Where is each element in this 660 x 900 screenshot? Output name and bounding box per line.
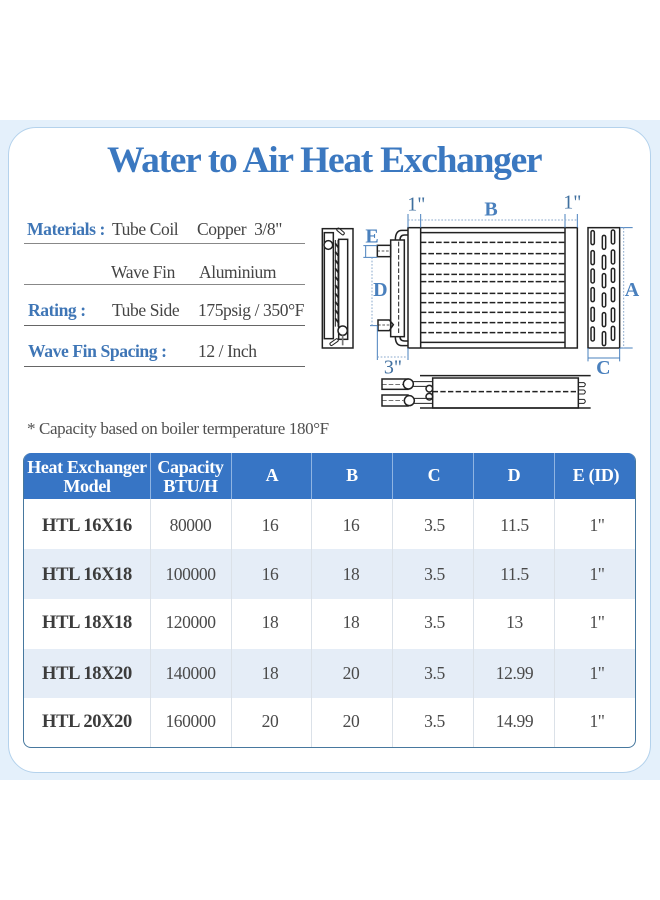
row: HTL 16X16: [42, 515, 605, 536]
row: HTL 18X20: 1": [589, 663, 605, 683]
spec: tube coil: Tube Coil: [112, 219, 178, 239]
row bands: [24, 549, 637, 599]
row: HTL 18X18: HTL 18X18: [42, 613, 132, 633]
row: HTL 20X20: 20: [262, 711, 278, 731]
row: HTL 16X18: 1": [589, 564, 605, 584]
title: Water to Air Heat Exchanger: [107, 140, 541, 181]
row: HTL 18X18: 13: [506, 612, 523, 632]
row: HTL 18X20: [42, 663, 605, 684]
row: HTL 18X18: 120000: [165, 612, 216, 632]
row: HTL 20X20: 20: [343, 711, 359, 731]
header: B: B: [346, 465, 358, 485]
header: capacity: Capacity: [157, 457, 224, 477]
row: HTL 18X18: 1": [589, 612, 605, 632]
spec: wave fin: Wave Fin: [111, 262, 175, 282]
row: HTL 18X20: 3.5: [424, 663, 445, 683]
header: model: Model: [63, 476, 111, 496]
dimension letters: E: [365, 226, 379, 248]
row: HTL 20X20: HTL 20X20: [42, 712, 132, 732]
header: D: D: [508, 465, 520, 485]
row: HTL 18X20: 12.99: [496, 663, 533, 683]
row: HTL 18X18: 18: [343, 612, 359, 632]
specification table: [23, 453, 636, 748]
footnote: * Capacity based on boiler termperature 180°F: [27, 419, 329, 438]
row: HTL 20X20: 1": [589, 711, 605, 731]
table header: [24, 453, 637, 499]
dimension letters: B: [484, 198, 498, 220]
dimension letters: 1": [563, 191, 581, 213]
header: C: C: [428, 465, 440, 485]
spec: aluminium: Aluminium: [199, 262, 276, 282]
row: HTL 18X18: 18: [262, 612, 278, 632]
row: HTL 16X18: [42, 564, 605, 585]
dimension letters: [365, 191, 640, 379]
technical diagram: [322, 191, 640, 409]
header: capacity: [157, 457, 224, 496]
spec: copper: Copper 3/8": [197, 219, 282, 239]
dimension letters: A: [625, 279, 640, 301]
side view: [322, 228, 353, 348]
row: HTL 16X16: 16: [262, 515, 278, 535]
row: HTL 16X18: HTL 16X18: [42, 565, 132, 585]
row: HTL 16X16: HTL 16X16: [42, 516, 132, 536]
row: HTL 20X20: [42, 711, 605, 732]
header: capacity: BTU/H: [163, 476, 218, 496]
dimension letters: 1": [407, 194, 425, 216]
row: HTL 18X20: 140000: [165, 663, 216, 683]
dimension lines: [363, 214, 633, 361]
row: HTL 16X16: 80000: [170, 515, 211, 535]
label: wave fin spacing: Wave Fin Spacing :: [28, 341, 167, 361]
row: HTL 18X18: 3.5: [424, 612, 445, 632]
dimension letters: 3": [384, 356, 402, 378]
row: HTL 16X18: 100000: [165, 564, 216, 584]
dimension letters: D: [373, 279, 388, 301]
panel: white card: [8, 127, 651, 773]
row: HTL 18X18: [42, 612, 605, 633]
label: rating: Rating :: [28, 300, 86, 320]
header: model: [27, 457, 147, 496]
dimension letters: C: [596, 357, 611, 379]
row: HTL 18X20: 18: [262, 663, 278, 683]
row: HTL 20X20: 160000: [165, 711, 216, 731]
end view: fin holes: [588, 228, 620, 348]
label: materials: Materials :: [27, 219, 105, 239]
row: HTL 16X18: 11.5: [500, 564, 529, 584]
row: HTL 16X16: 11.5: [500, 515, 529, 535]
row: HTL 16X16: 3.5: [424, 515, 445, 535]
row: HTL 16X16: 1": [589, 515, 605, 535]
front view: coil body: [377, 228, 577, 348]
header: model: Heat Exchanger: [27, 457, 147, 477]
spec: rating value: 175psig / 350°F: [198, 300, 304, 320]
row: HTL 16X16: 16: [343, 515, 359, 535]
row: HTL 18X20: 20: [343, 663, 359, 683]
row: HTL 18X20: HTL 18X20: [42, 664, 132, 684]
row: HTL 16X18: 16: [262, 564, 278, 584]
spec block: materials and ratings: [27, 219, 304, 361]
row: HTL 16X18: 18: [343, 564, 359, 584]
row: HTL 20X20: 3.5: [424, 711, 445, 731]
spec: tube side: Tube Side: [112, 300, 179, 320]
bottom view: [382, 376, 591, 408]
header: A: A: [266, 465, 278, 485]
row: HTL 20X20: 14.99: [496, 711, 533, 731]
spec: spacing value: 12 / Inch: [198, 341, 257, 361]
row: HTL 16X18: 3.5: [424, 564, 445, 584]
header: E: E (ID): [573, 465, 619, 485]
